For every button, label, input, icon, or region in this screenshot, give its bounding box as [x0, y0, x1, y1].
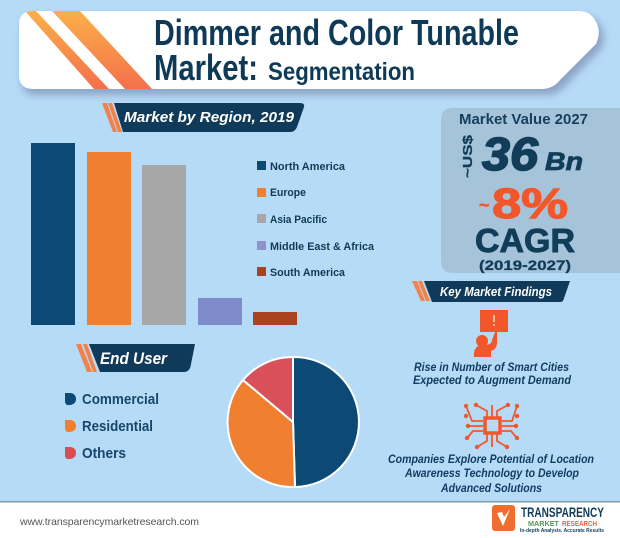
heading: key market findings	[412, 281, 570, 302]
legend: regions: Europe	[270, 187, 306, 199]
legend: end user	[65, 391, 159, 462]
finding text: location awareness: Companies Explore Potential of Location	[388, 452, 594, 466]
finding text: location awareness: Awareness Technology to Develop	[404, 466, 579, 480]
title text: Segmentation	[268, 58, 415, 86]
icon: person with sign	[474, 310, 508, 357]
website url: www.transparencymarketresearch.com	[19, 516, 199, 528]
legend: end user: Residential	[82, 418, 153, 435]
finding text: smart cities: Rise in Number of Smart Cities	[414, 360, 569, 374]
value 36 Bn	[482, 128, 583, 180]
legend: regions: Asia Pacific	[270, 214, 327, 226]
title text: Market:	[154, 47, 258, 88]
legend: regions: South America	[270, 267, 346, 279]
title text	[154, 12, 519, 88]
legend: regions	[257, 161, 375, 279]
logo	[492, 504, 604, 534]
bar chart: market by region	[31, 143, 297, 325]
CAGR label: CAGR	[475, 222, 575, 259]
market value heading: Market Value 2027	[459, 111, 588, 128]
finding text: location awareness	[388, 452, 594, 495]
CAGR value	[479, 180, 568, 228]
pie chart: end user	[228, 357, 359, 487]
CAGR value: 8%	[492, 180, 568, 228]
title text: Dimmer and Color Tunable	[154, 12, 519, 53]
value 36 Bn: Bn	[545, 148, 583, 176]
value 36 Bn: 36	[482, 128, 538, 180]
heading: market by region	[102, 103, 304, 132]
legend: regions: Middle East & Africa	[270, 241, 375, 253]
legend: end user: Commercial	[82, 391, 159, 408]
title banner	[19, 11, 604, 95]
icon: circuit chip	[464, 403, 519, 449]
logo: RESEARCH	[562, 519, 597, 528]
legend: regions: North America	[270, 161, 346, 173]
panel: market value	[441, 108, 620, 273]
heading: market by region: Market by Region, 2019	[124, 109, 295, 126]
CAGR period: (2019-2027)	[479, 257, 571, 273]
heading: end user: End User	[100, 349, 168, 368]
finding text: smart cities: Expected to Augment Demand	[413, 373, 572, 387]
logo: In-depth Analysis. Accurate Results	[520, 528, 604, 534]
heading: end user	[76, 344, 195, 372]
logo: MARKET	[528, 519, 559, 528]
legend: end user: Others	[82, 445, 126, 462]
footer	[0, 501, 620, 538]
heading: key market findings: Key Market Findings	[440, 285, 552, 299]
finding text: location awareness: Advanced Solutions	[440, 481, 542, 495]
finding text: smart cities	[413, 360, 572, 387]
CAGR value: ~	[479, 195, 490, 215]
currency label: ~US$	[460, 134, 475, 178]
